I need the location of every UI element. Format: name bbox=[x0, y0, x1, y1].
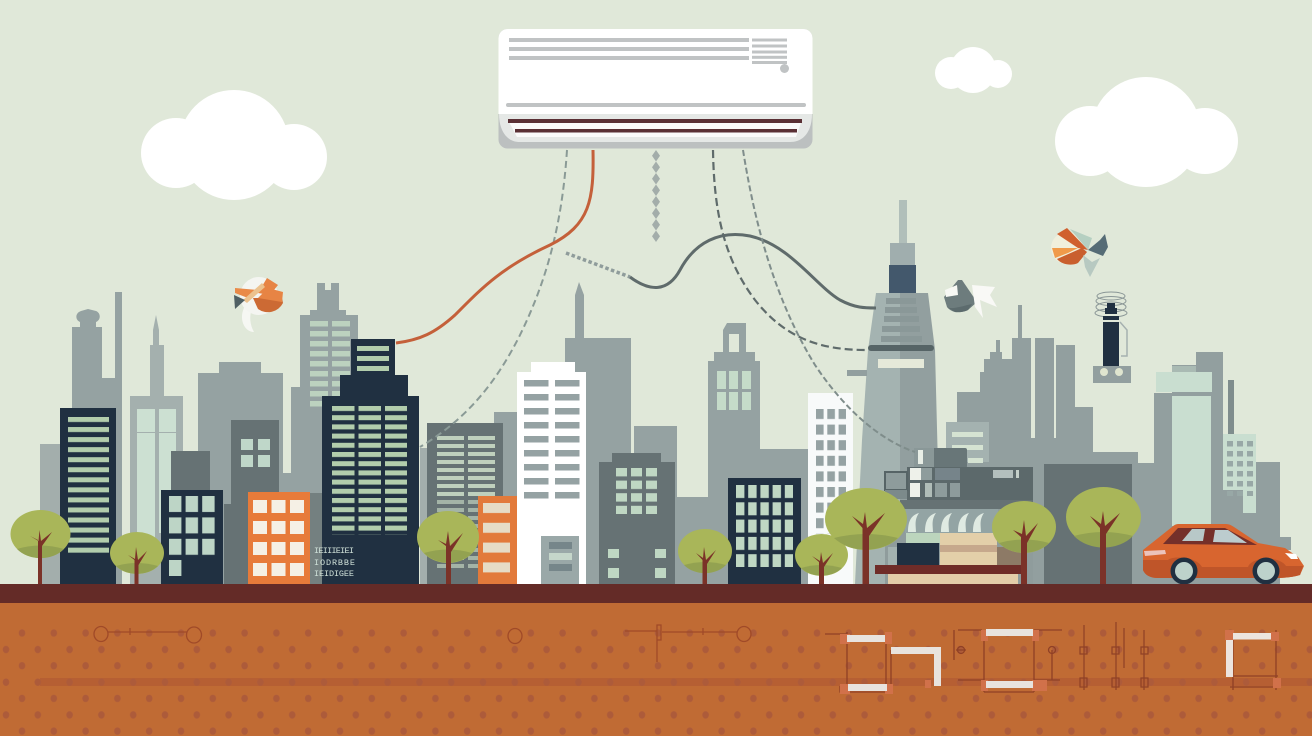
tail and head lights bbox=[1144, 550, 1166, 556]
dashed light cord bbox=[743, 150, 915, 452]
diagonal chain bbox=[566, 253, 630, 277]
soil dots bbox=[0, 625, 1312, 736]
hanging chain centre bbox=[652, 150, 660, 242]
tree 4 bbox=[678, 529, 732, 584]
tree 8 bbox=[1066, 487, 1141, 584]
grey building with horizontal windows bbox=[427, 423, 503, 584]
icon: flying leaf right bbox=[1051, 228, 1108, 277]
navy short building bbox=[161, 490, 223, 584]
pipe frame group 2 bbox=[954, 629, 1062, 692]
orange narrow building bbox=[478, 496, 518, 584]
pale right building bbox=[1156, 366, 1212, 526]
background skyline bbox=[40, 200, 1291, 584]
tower window opening bbox=[729, 334, 739, 352]
spire building bbox=[130, 315, 183, 584]
cords from the air conditioner bbox=[396, 150, 915, 452]
tower windows bbox=[717, 371, 751, 410]
cloud: right bbox=[1055, 77, 1238, 187]
car bbox=[1143, 524, 1304, 584]
right background buildings bbox=[946, 305, 1291, 584]
road strip bbox=[0, 584, 1312, 603]
mixed low complex bbox=[875, 448, 1033, 584]
vent louver bbox=[499, 114, 812, 142]
front buildings bbox=[60, 339, 1132, 584]
navy window building bbox=[728, 478, 801, 584]
tree 7 bbox=[992, 501, 1056, 584]
narrow light building bbox=[1223, 434, 1257, 513]
icon: flying leaf middle bbox=[944, 280, 997, 318]
small signage text: IODRBBE bbox=[314, 558, 355, 568]
dashed cord left bbox=[420, 150, 567, 447]
soil band bbox=[40, 678, 1312, 686]
small signage text bbox=[314, 546, 355, 579]
left background buildings bbox=[40, 283, 358, 584]
pipe frame group 1 bbox=[825, 632, 966, 694]
white narrow building bbox=[808, 393, 853, 584]
dashed dark cord bbox=[713, 150, 866, 350]
panes on dark grey block bbox=[241, 439, 270, 467]
tower windows bbox=[310, 321, 354, 409]
pipes left bbox=[94, 625, 751, 662]
awning row bbox=[908, 513, 984, 532]
tree 1 bbox=[10, 510, 70, 584]
navy tall building left bbox=[60, 408, 116, 584]
antenna tower bbox=[1228, 380, 1234, 435]
orange building bbox=[248, 492, 310, 584]
ground bbox=[0, 584, 1312, 736]
car windows bbox=[1163, 528, 1257, 545]
grille lines bbox=[506, 38, 806, 107]
air conditioner unit bbox=[498, 29, 812, 148]
icon: bottle device bbox=[1093, 292, 1131, 383]
cloud: small top bbox=[935, 47, 1012, 93]
tree 5 bbox=[795, 534, 848, 584]
big tower bbox=[847, 200, 941, 584]
navy main skyscraper bbox=[322, 339, 419, 584]
orange cord bbox=[396, 150, 593, 343]
car wheels bbox=[1170, 558, 1280, 584]
small signage text: IEIDIGEE bbox=[314, 569, 354, 579]
tree 6 bbox=[825, 488, 907, 584]
tree 3 bbox=[417, 511, 479, 584]
soil layer bbox=[0, 603, 1312, 736]
pipe frame group 3 bbox=[1225, 630, 1281, 690]
vertical pipes bbox=[1080, 622, 1148, 690]
dark grey background blocks bbox=[171, 420, 324, 584]
grey mid-rise building bbox=[599, 453, 675, 584]
small signage text: IEIIIEIEI bbox=[314, 546, 354, 556]
underground pipes bbox=[94, 622, 1281, 694]
dark grey building right bbox=[1044, 464, 1132, 584]
unit shell bbox=[498, 29, 812, 148]
tree 2 bbox=[110, 532, 164, 584]
icon: flying leaf left bbox=[234, 277, 283, 332]
light stepped building bbox=[946, 422, 989, 463]
white building bbox=[517, 362, 586, 584]
cloud: left bbox=[141, 90, 327, 200]
trees bbox=[10, 487, 1141, 584]
central background buildings bbox=[420, 282, 808, 584]
dark grey cord bbox=[630, 234, 876, 308]
